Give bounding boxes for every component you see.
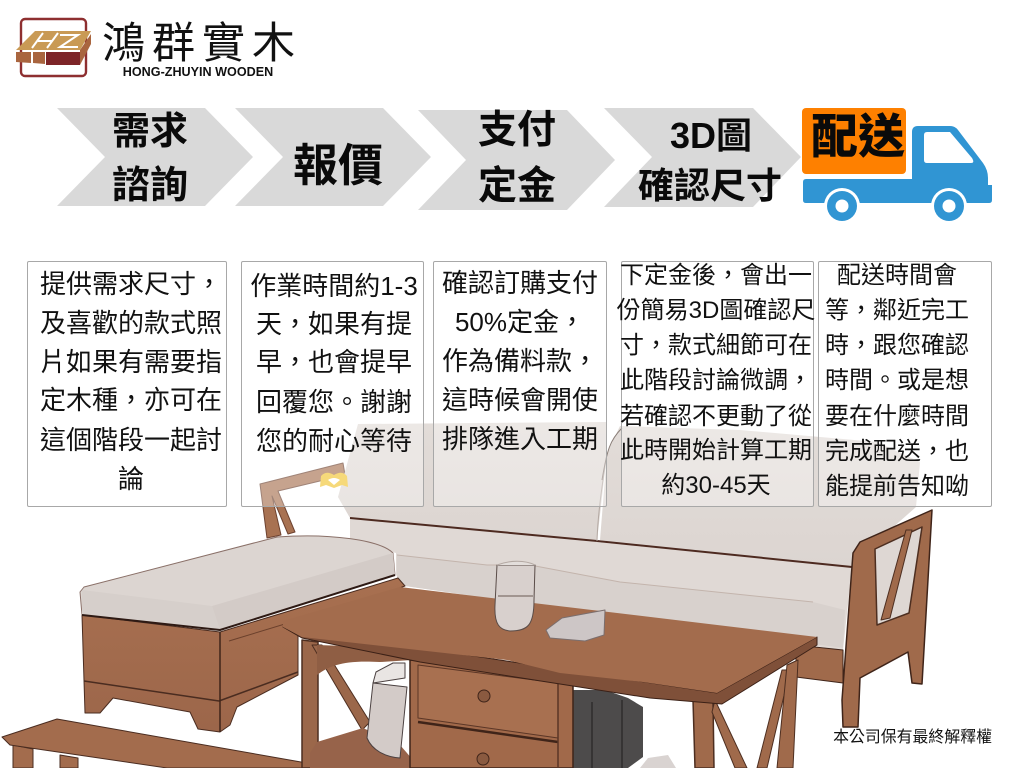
disclaimer note: 本公司保有最終解釋權	[833, 728, 992, 746]
sofa left armrest	[260, 463, 345, 538]
coffee table frame and legs	[302, 640, 798, 768]
sofa seat wooden rail	[796, 645, 843, 683]
description box 5: 等，鄰近完工	[825, 297, 969, 324]
coffee table top	[283, 587, 817, 704]
illustration: wooden sofa and coffee table	[2, 422, 932, 768]
books on table shelf	[573, 690, 643, 768]
description box 4: 此時開始計算工期	[620, 437, 812, 464]
step 5: truck icon with 配送	[802, 108, 992, 224]
description box 1: 定木種，亦可在	[40, 385, 222, 415]
folded cloth on table	[546, 610, 605, 641]
logo wordmark: 鴻群實木	[102, 9, 302, 71]
step 4: 3D圖確認尺寸	[604, 108, 801, 207]
kettle	[367, 663, 407, 758]
description box 5: 完成配送，也	[825, 438, 969, 465]
description box 4: 此階段討論微調，	[620, 367, 812, 394]
description box 2: 早，也會提早	[256, 347, 412, 377]
description box 4: 份簡易3D圖確認尺	[617, 297, 815, 324]
description box 2: 作業時間約1-3	[250, 271, 418, 301]
description box 2: 您的耐心等待	[256, 426, 412, 456]
sofa seat cushion	[350, 518, 852, 650]
description box 3: 確認訂購支付	[442, 268, 598, 298]
drawers	[410, 660, 573, 768]
description box 4: 下定金後，會出一	[620, 262, 812, 289]
description box 3: 這時候會開使	[442, 385, 598, 415]
description box 4: 寸，款式細節可在	[620, 332, 812, 359]
step 4: 3D圖確認尺寸: 3D圖	[670, 115, 752, 156]
step 3: 支付定金	[418, 109, 615, 210]
step 3: 支付定金: 定金	[478, 165, 556, 208]
chaise cushion	[80, 536, 395, 630]
description box 5: 能提前告知呦	[825, 473, 969, 500]
description box 3	[434, 262, 606, 506]
logo	[16, 9, 302, 79]
description box 5	[818, 262, 992, 506]
description box 2	[242, 262, 424, 506]
chaise wooden base	[82, 578, 405, 732]
description box 1	[28, 262, 226, 506]
sofa back cushions	[338, 422, 920, 567]
description box 4	[617, 262, 815, 506]
description box 1: 論	[118, 464, 144, 494]
process chevrons	[57, 108, 992, 224]
step 1: 需求諮詢: 需求	[112, 111, 188, 153]
bench in foreground	[2, 719, 335, 768]
step 3: 支付定金: 支付	[478, 109, 556, 152]
step 2: 報價	[235, 108, 431, 206]
description box 1: 這個階段一起討	[40, 425, 222, 455]
logo english name: HONG-ZHUYIN WOODEN	[123, 65, 273, 79]
description box 5: 時間。或是想	[825, 367, 969, 394]
water glass	[495, 561, 535, 631]
description box 3: 排隊進入工期	[442, 424, 598, 454]
step 2: 報價: 報價	[293, 140, 383, 191]
logo icon	[16, 19, 91, 76]
description box 3: 50%定金，	[455, 307, 585, 337]
truck	[803, 126, 992, 224]
description box 1: 及喜歡的款式照	[40, 308, 222, 338]
small object on shelf	[640, 755, 676, 768]
step 1: 需求諮詢: 諮詢	[112, 165, 188, 207]
description box 2: 天，如果有提	[256, 309, 412, 339]
description box 4: 若確認不更動了從	[620, 403, 812, 430]
step 4: 3D圖確認尺寸: 確認尺寸	[638, 165, 782, 206]
icon: heart hands	[320, 473, 348, 488]
description box 1: 提供需求尺寸，	[40, 269, 222, 299]
sofa right armrest and back frame	[842, 510, 932, 727]
description box 3: 作為備料款，	[442, 346, 598, 376]
description box 1: 片如果有需要指	[40, 347, 222, 377]
description box 4: 約30-45天	[661, 472, 771, 499]
description box 5: 要在什麼時間	[825, 403, 969, 430]
description box 5: 時，跟您確認	[825, 332, 969, 359]
orange label: 配送	[811, 110, 905, 163]
description box 5: 配送時間會	[837, 262, 957, 289]
step 1: 需求諮詢	[57, 108, 253, 207]
description box 2: 回覆您。謝謝	[256, 387, 412, 417]
